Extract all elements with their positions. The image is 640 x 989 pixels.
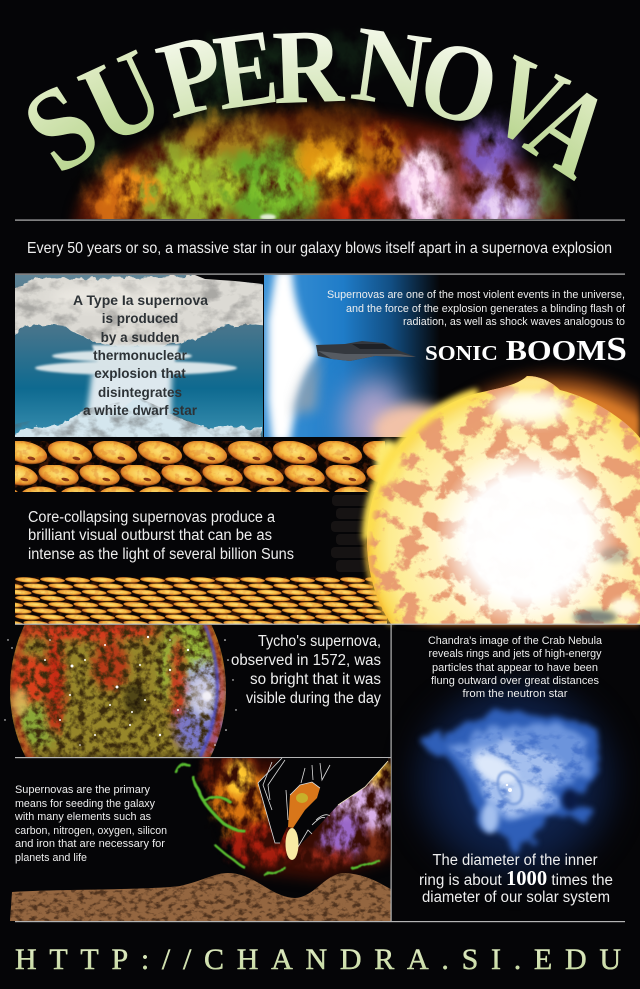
footer url: HTTP://CHANDRA.SI.EDU bbox=[15, 943, 621, 976]
top nebula image bbox=[68, 32, 572, 219]
core-collapse text: Core-collapsing supernovas produce a bbox=[28, 509, 275, 526]
star glow bbox=[350, 355, 640, 625]
mushroom cloud caption: disintegrates bbox=[98, 385, 182, 400]
mushroom cloud caption: a white dwarf star bbox=[83, 403, 198, 418]
title: V bbox=[470, 29, 584, 174]
divider under title bbox=[15, 220, 625, 221]
hand outline bbox=[258, 758, 388, 847]
Crab nebula text bbox=[428, 635, 602, 700]
soil bbox=[10, 873, 390, 921]
Crab nebula text: particles that appear to have been bbox=[432, 662, 598, 674]
sonic boom text: and the force of the explosion generates a blinding flash of bbox=[346, 303, 625, 315]
shock cone bbox=[268, 270, 317, 442]
remnant disc bbox=[10, 625, 226, 757]
seed bbox=[286, 828, 298, 860]
sonic booms heading: SONIC BOOM S bbox=[425, 331, 627, 368]
mushroom cloud caption: A Type Ia supernova bbox=[73, 293, 208, 308]
core-collapse text: brilliant visual outburst that can be as bbox=[28, 527, 272, 544]
divider under Tycho bbox=[15, 757, 391, 758]
divider above footer bbox=[15, 921, 625, 922]
nebula bbox=[202, 745, 397, 866]
title: E bbox=[207, 6, 284, 133]
panel: mushroom cloud bbox=[10, 275, 266, 440]
light between the fingers bbox=[288, 782, 320, 828]
band of star bricks upper bbox=[15, 441, 385, 492]
green strands bbox=[176, 764, 378, 875]
vertical divider bbox=[390, 624, 392, 922]
title bbox=[1, 3, 634, 205]
seeding text: with many elements such as bbox=[14, 811, 151, 823]
star sphere bbox=[350, 370, 640, 625]
mushroom cloud caption: explosion that bbox=[94, 366, 186, 381]
mushroom cloud caption: thermonuclear bbox=[93, 348, 188, 363]
core-collapse text: intense as the light of several billion Suns bbox=[28, 546, 294, 563]
inner ring text bbox=[419, 852, 613, 906]
blue sky bbox=[264, 275, 440, 437]
panel: sonic boom jet bbox=[264, 275, 443, 437]
seeding text: and iron that are necessary for bbox=[15, 838, 165, 850]
faded brick wall bbox=[331, 495, 368, 572]
flat rings of cloud bbox=[35, 345, 237, 375]
lilac glow bbox=[343, 380, 407, 464]
Tycho text: Tycho's supernova, bbox=[258, 633, 381, 650]
inner ring text: ring is about 1000 times the bbox=[419, 866, 613, 890]
inner ring text: diameter of our solar system bbox=[422, 889, 610, 906]
seeding text: planets and life bbox=[15, 852, 87, 864]
cloud stem bbox=[86, 372, 172, 420]
Crab nebula text: flung outward over great distances bbox=[431, 675, 600, 687]
inner ring text: The diameter of the inner bbox=[432, 852, 598, 869]
sonic boom text bbox=[327, 289, 625, 328]
Tycho text bbox=[231, 633, 381, 707]
Tycho supernova remnant bbox=[4, 625, 237, 757]
sonic boom text: Supernovas are one of the most violent events in the universe, bbox=[327, 289, 625, 301]
Crab nebula text: from the neutron star bbox=[462, 688, 568, 700]
sky bbox=[15, 275, 263, 437]
mushroom cloud caption: by a sudden bbox=[101, 330, 179, 345]
divider under star bbox=[15, 624, 640, 625]
title: R bbox=[271, 7, 347, 127]
mushroom cloud caption bbox=[73, 293, 208, 418]
bright star bbox=[202, 691, 212, 701]
Crab nebula text: Chandra's image of the Crab Nebula bbox=[428, 635, 602, 647]
divider under intro bbox=[15, 274, 625, 275]
title: P bbox=[146, 8, 237, 142]
seeding text: carbon, nitrogen, oxygen, silicon bbox=[15, 825, 167, 837]
Tycho text: so bright that it was bbox=[250, 671, 381, 688]
snowy mountain bbox=[15, 400, 262, 437]
title: N bbox=[346, 3, 437, 132]
Crab nebula image bbox=[410, 680, 620, 880]
sonic boom text: radiation, as well as shock waves analogous to bbox=[403, 316, 625, 328]
band of star bricks lower bbox=[15, 577, 387, 624]
seeding text: Supernovas are the primary bbox=[15, 784, 150, 796]
Tycho text: visible during the day bbox=[246, 690, 381, 707]
hand silhouette bbox=[258, 758, 388, 847]
exploding star bbox=[350, 355, 640, 625]
title: A bbox=[506, 55, 634, 205]
jet bbox=[316, 341, 416, 361]
yellow flare on bricks bbox=[375, 440, 401, 484]
title: O bbox=[407, 15, 511, 152]
seeding text bbox=[14, 784, 167, 864]
Tycho text: observed in 1572, was bbox=[231, 652, 381, 669]
black corner bbox=[195, 275, 263, 284]
core-collapse text bbox=[28, 509, 294, 563]
seeding text: means for seeding the galaxy bbox=[15, 798, 155, 810]
title: S bbox=[1, 57, 120, 198]
cloud head bbox=[12, 276, 266, 348]
seeding the galaxy illustration bbox=[176, 745, 397, 880]
red glow bbox=[205, 758, 391, 880]
Crab nebula text: reveals rings and jets of high-energy bbox=[428, 648, 602, 660]
stars bbox=[4, 636, 237, 746]
title: U bbox=[63, 25, 181, 170]
mushroom cloud caption: is produced bbox=[102, 311, 178, 326]
